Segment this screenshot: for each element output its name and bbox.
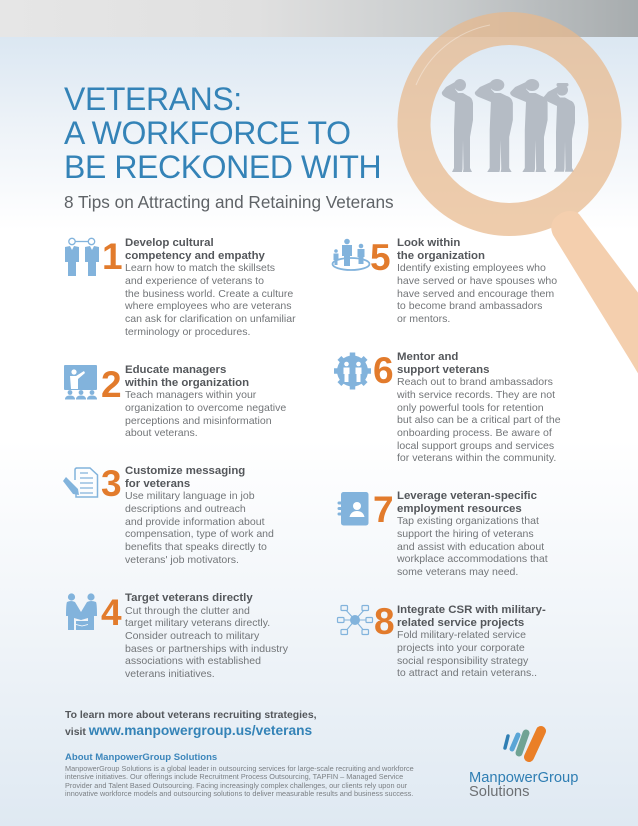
heading: Customize messaging — [125, 465, 245, 477]
body: Fold military-related service — [397, 629, 526, 641]
body: benefits that speaks directly to — [125, 541, 267, 553]
about body: Provider and Talent Based Outsourcing. Facing increasingly complex challenges, our clients rely upon our — [65, 781, 407, 790]
body: veterans initiatives. — [125, 668, 215, 680]
heading: related service projects — [397, 617, 524, 629]
body: Use military language in job — [125, 490, 255, 502]
heading: the organization — [397, 250, 485, 262]
heading: support veterans — [397, 364, 489, 376]
logo text: Solutions — [469, 784, 529, 800]
body: for veterans within the community. — [397, 452, 556, 464]
icon: gear with two people — [334, 352, 371, 390]
body — [125, 389, 286, 439]
body — [125, 262, 296, 338]
tip 5 — [332, 237, 557, 325]
body: Teach managers within your — [125, 389, 256, 401]
heading — [397, 604, 546, 629]
body: workplace accommodations that — [397, 553, 548, 565]
body: projects into your corporate — [397, 642, 525, 654]
magnifier ring — [414, 28, 605, 220]
body: support the hiring of veterans — [397, 528, 534, 540]
heading — [397, 237, 485, 262]
body: and assist with education about — [397, 541, 544, 553]
heading — [125, 364, 249, 389]
heading — [125, 237, 265, 262]
body: terminology or procedures. — [125, 326, 250, 338]
body: bases or partnerships with industry — [125, 643, 288, 655]
subtitle: 8 Tips on Attracting and Retaining Veterans — [64, 192, 394, 212]
title: A WORKFORCE TO — [64, 115, 351, 151]
body: the business world. Create a culture — [125, 288, 293, 300]
ring highlight — [416, 25, 490, 85]
logo mark — [503, 726, 546, 762]
about body: intensive initiatives. Our offerings include Recruitment Process Outsourcing, TAPFIN – Managed Service — [65, 772, 403, 781]
tip 2 — [64, 364, 286, 439]
number 5: 5 — [370, 237, 391, 278]
body: some veterans may need. — [397, 566, 518, 578]
body: to attract and retain veterans.. — [397, 667, 537, 679]
title — [64, 81, 381, 185]
body: Tap existing organizations that — [397, 515, 539, 527]
body: Identify existing employees who — [397, 262, 546, 274]
soldiers — [442, 79, 575, 172]
body — [125, 490, 274, 566]
tip 6 — [334, 350, 561, 464]
body — [397, 515, 548, 578]
heading: Target veterans directly — [125, 592, 253, 604]
logo text — [469, 770, 578, 800]
icon: people on ring — [332, 238, 370, 271]
body: descriptions and outreach — [125, 503, 246, 515]
call to action: visit www.manpowergroup.us/veterans — [65, 722, 312, 738]
number 7: 7 — [373, 489, 394, 530]
logo — [469, 726, 578, 800]
body: can ask for clarification on unfamiliar — [125, 313, 296, 325]
body: have served or have spouses who — [397, 275, 557, 287]
tip 7 — [338, 489, 548, 578]
about body: innovative workforce models and outsourcing solutions to deliver measurable results and business success. — [65, 789, 413, 798]
body — [397, 629, 537, 679]
body: but also can be a critical part of the — [397, 414, 561, 426]
magnifier handle — [551, 211, 638, 410]
tip 4 — [66, 592, 288, 680]
body: have served and encourage them — [397, 288, 554, 300]
about body — [65, 764, 414, 798]
call to action: To learn more about veterans recruiting strategies, — [65, 710, 317, 721]
body: onboarding process. Be aware of — [397, 427, 552, 439]
heading — [397, 490, 537, 515]
body — [125, 605, 288, 680]
icon: address book — [338, 492, 368, 526]
body: social responsibility strategy — [397, 655, 528, 667]
tip 1 — [65, 236, 296, 338]
call to action — [65, 710, 317, 738]
title: VETERANS: — [64, 81, 242, 117]
number 3: 3 — [101, 463, 122, 504]
body — [397, 376, 561, 464]
body: about veterans. — [125, 427, 198, 439]
heading: Integrate CSR with military- — [397, 604, 546, 616]
tip 3 — [63, 463, 274, 566]
body: perceptions and misinformation — [125, 415, 272, 427]
body — [397, 262, 557, 325]
logo text: ManpowerGroup — [469, 770, 578, 786]
heading: within the organization — [125, 377, 249, 389]
icon: network hub — [336, 604, 374, 636]
title: BE RECKONED WITH — [64, 149, 381, 185]
heading — [125, 465, 245, 490]
icon: handshake with briefcase — [66, 593, 97, 630]
number 8: 8 — [374, 601, 395, 642]
number 6: 6 — [373, 350, 394, 391]
body: Reach out to brand ambassadors — [397, 376, 553, 388]
body: to become brand ambassadors — [397, 300, 542, 312]
body: local support groups and services — [397, 440, 554, 452]
body: Cut through the clutter and — [125, 605, 250, 617]
icon: two suited figures linked — [65, 238, 99, 276]
body: veterans' job motivators. — [125, 554, 239, 566]
body: and experience of veterans to — [125, 275, 264, 287]
body: organization to overcome negative — [125, 402, 286, 414]
tip 8 — [336, 601, 546, 679]
heading: employment resources — [397, 503, 522, 515]
body: compensation, type of work and — [125, 528, 274, 540]
icon: document and pencil — [63, 467, 98, 498]
number 2: 2 — [101, 364, 122, 405]
about body: ManpowerGroup Solutions is a global leader in outsourcing services for large-scale recruiting and workforce — [65, 764, 414, 773]
body: associations with established — [125, 655, 261, 667]
body: with service records. They are not — [397, 389, 555, 401]
heading: Mentor and — [397, 351, 458, 363]
about heading: About ManpowerGroup Solutions — [65, 752, 217, 763]
body: and provide information about — [125, 516, 265, 528]
icon: presenter with audience — [64, 365, 97, 400]
body: Learn how to match the skillsets — [125, 262, 275, 274]
number 1: 1 — [102, 236, 123, 277]
body: target military veterans directly. — [125, 617, 270, 629]
top grey band — [0, 0, 638, 37]
body: Consider outreach to military — [125, 630, 259, 642]
heading — [397, 351, 489, 376]
heading: Educate managers — [125, 364, 226, 376]
heading: Develop cultural — [125, 237, 214, 249]
heading: Leverage veteran-specific — [397, 490, 537, 502]
body: or mentors. — [397, 313, 450, 325]
number 4: 4 — [101, 592, 122, 633]
heading: for veterans — [125, 478, 190, 490]
body: where employees who are veterans — [125, 300, 292, 312]
body: only powerful tools for retention — [397, 402, 544, 414]
heading: competency and empathy — [125, 250, 265, 262]
heading: Look within — [397, 237, 460, 249]
